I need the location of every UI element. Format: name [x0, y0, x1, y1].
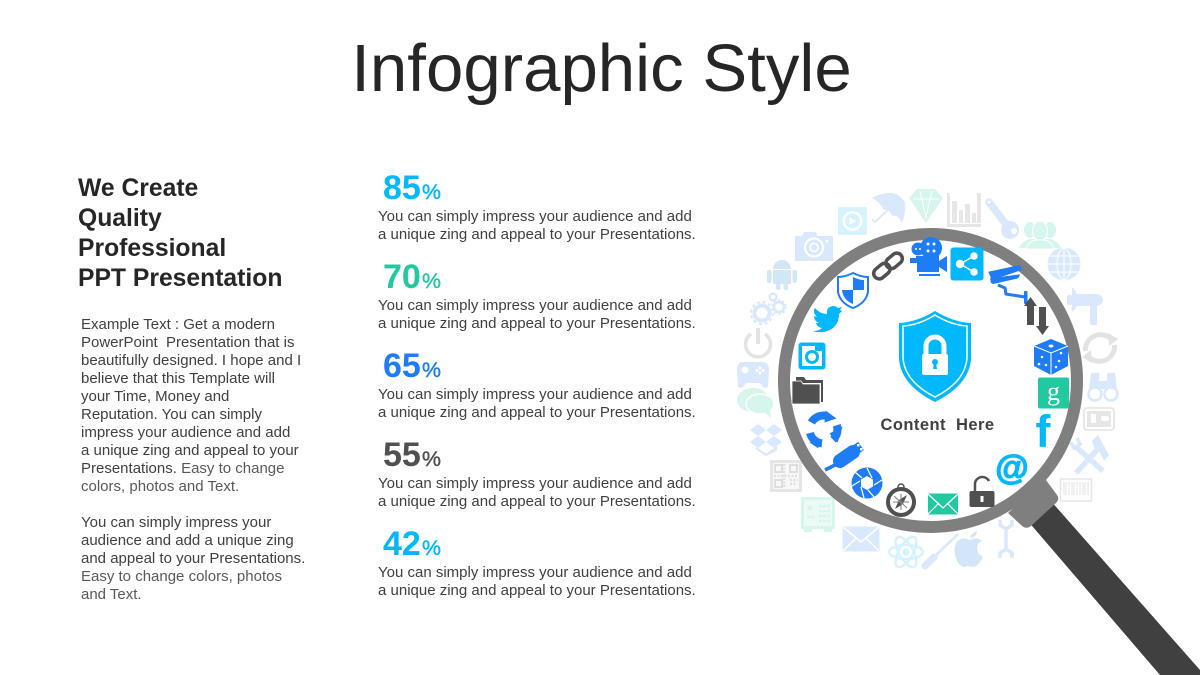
stat: 42 percent: You can simply impress your audience and add [378, 564, 692, 581]
icon: instagram [798, 342, 826, 370]
text block: example text: beautifully designed. I hope and I [81, 352, 301, 369]
stat: 85 percent: % [422, 180, 441, 204]
icon: binoculars [1088, 373, 1118, 400]
heading: we create quality: Professional [78, 235, 226, 262]
icon: folder [792, 377, 823, 404]
icon: chat bubbles [737, 388, 774, 418]
text: content here: Content Here [880, 416, 995, 434]
text block: example text: Presentations. Easy to change [81, 460, 284, 477]
stat: 55 percent: a unique zing and appeal to your Presentations. [378, 493, 696, 510]
icon: globe [1048, 248, 1080, 280]
text block: second paragraph: and appeal to your Presentations. [81, 550, 305, 567]
text block: example text: your Time, Money and [81, 388, 229, 405]
icon: play square [838, 207, 867, 235]
title: Infographic Style [351, 31, 852, 106]
icon: photo camera [795, 232, 833, 261]
icon: envelope [842, 526, 880, 552]
stat: 42 percent [378, 525, 696, 599]
icon: double spanner [1000, 520, 1012, 558]
icon: main shield with lock [899, 311, 971, 402]
text block: example text: PowerPoint Presentation that is [81, 334, 294, 351]
icon: link [871, 251, 905, 281]
stat: 65 percent: a unique zing and appeal to your Presentations. [378, 404, 696, 421]
stat: 55 percent [378, 436, 696, 510]
icon: dice [1034, 339, 1068, 375]
text block: second paragraph: You can simply impress your [81, 514, 271, 531]
icon: cctv [988, 265, 1028, 304]
stat: 65 percent [378, 347, 696, 421]
stat: 42 percent: % [422, 536, 441, 560]
icon: dropbox [750, 424, 782, 455]
icon: megaphone [1067, 287, 1103, 325]
text block: example text: believe that this Template will [81, 370, 275, 387]
icon: usb plug [825, 444, 862, 470]
icon: people [1019, 221, 1061, 249]
stat: 70 percent: % [422, 269, 441, 293]
stat: 85 percent [378, 169, 696, 243]
stat: 55 percent: 55 [383, 436, 421, 474]
stat: 42 percent: a unique zing and appeal to your Presentations. [378, 582, 696, 599]
icon: twitter bird [813, 306, 842, 332]
icon: apple [954, 531, 983, 567]
icon: power [746, 328, 770, 357]
icon: crossed tools [1071, 435, 1109, 473]
icon: sync [1082, 333, 1118, 363]
heading: we create quality [78, 175, 282, 292]
icon: phone box [1084, 408, 1114, 430]
magnifier collar [1008, 480, 1058, 528]
heading: we create quality: PPT Presentation [78, 265, 282, 292]
stat: 65 percent: You can simply impress your audience and add [378, 386, 692, 403]
magnifier handle [1027, 500, 1200, 675]
icon: wrench [988, 200, 1019, 239]
icon: qr code [770, 460, 802, 492]
icon: google g [1038, 377, 1069, 408]
icon: compass [888, 484, 914, 515]
icon: film camera [910, 237, 947, 276]
icon: gamepad [737, 362, 769, 388]
stat: 70 percent [378, 258, 696, 332]
stat: 65 percent: % [422, 358, 441, 382]
text block: example text [81, 316, 301, 495]
stat: 42 percent: 42 [383, 525, 421, 563]
icon: android [767, 260, 797, 290]
icon: small shield [838, 273, 868, 308]
icon: google g: g [1047, 377, 1060, 406]
icon: atom [889, 534, 923, 570]
icon: barcode [1060, 479, 1092, 501]
stat: 55 percent: You can simply impress your audience and add [378, 475, 692, 492]
stat: 85 percent: a unique zing and appeal to your Presentations. [378, 226, 696, 243]
icon: facebook f: f [1036, 406, 1052, 457]
icon: up down arrows [1024, 297, 1049, 335]
icon: recycle [810, 410, 842, 448]
text block: example text: impress your audience and add [81, 424, 290, 441]
text block: second paragraph: audience and add a unique zing [81, 532, 294, 549]
text block: second paragraph [81, 514, 305, 603]
icon: at sign: @ [995, 449, 1029, 487]
stat: 70 percent: 70 [383, 258, 421, 296]
icon: share [950, 248, 984, 280]
stat: 85 percent: You can simply impress your audience and add [378, 208, 692, 225]
icon: open padlock [970, 477, 994, 507]
icon: screwdriver [925, 534, 958, 566]
magnifier ring [784, 234, 1077, 527]
text block: example text: Reputation. You can simply [81, 406, 262, 423]
stat: 70 percent: You can simply impress your audience and add [378, 297, 692, 314]
icon: safe [801, 497, 835, 532]
text block: second paragraph: Easy to change colors, photos [81, 568, 282, 585]
text block: second paragraph: and Text. [81, 586, 142, 603]
stat: 65 percent: 65 [383, 347, 421, 385]
stat: 70 percent: a unique zing and appeal to your Presentations. [378, 315, 696, 332]
icon: camera shutter [852, 468, 882, 498]
stat: 85 percent: 85 [383, 169, 421, 207]
text block: example text: a unique zing and appeal to your [81, 442, 299, 459]
icon: bar chart [947, 193, 981, 227]
icon: gears [751, 294, 786, 324]
icon: diamond [909, 189, 943, 223]
text block: example text: Example Text : Get a modern [81, 316, 275, 333]
heading: we create quality: Quality [78, 205, 162, 232]
stat: 55 percent: % [422, 447, 441, 471]
text block: example text: colors, photos and Text. [81, 478, 239, 495]
icon: green envelope [928, 494, 958, 514]
heading: we create quality: We Create [78, 175, 198, 202]
icon: umbrella [872, 193, 905, 223]
